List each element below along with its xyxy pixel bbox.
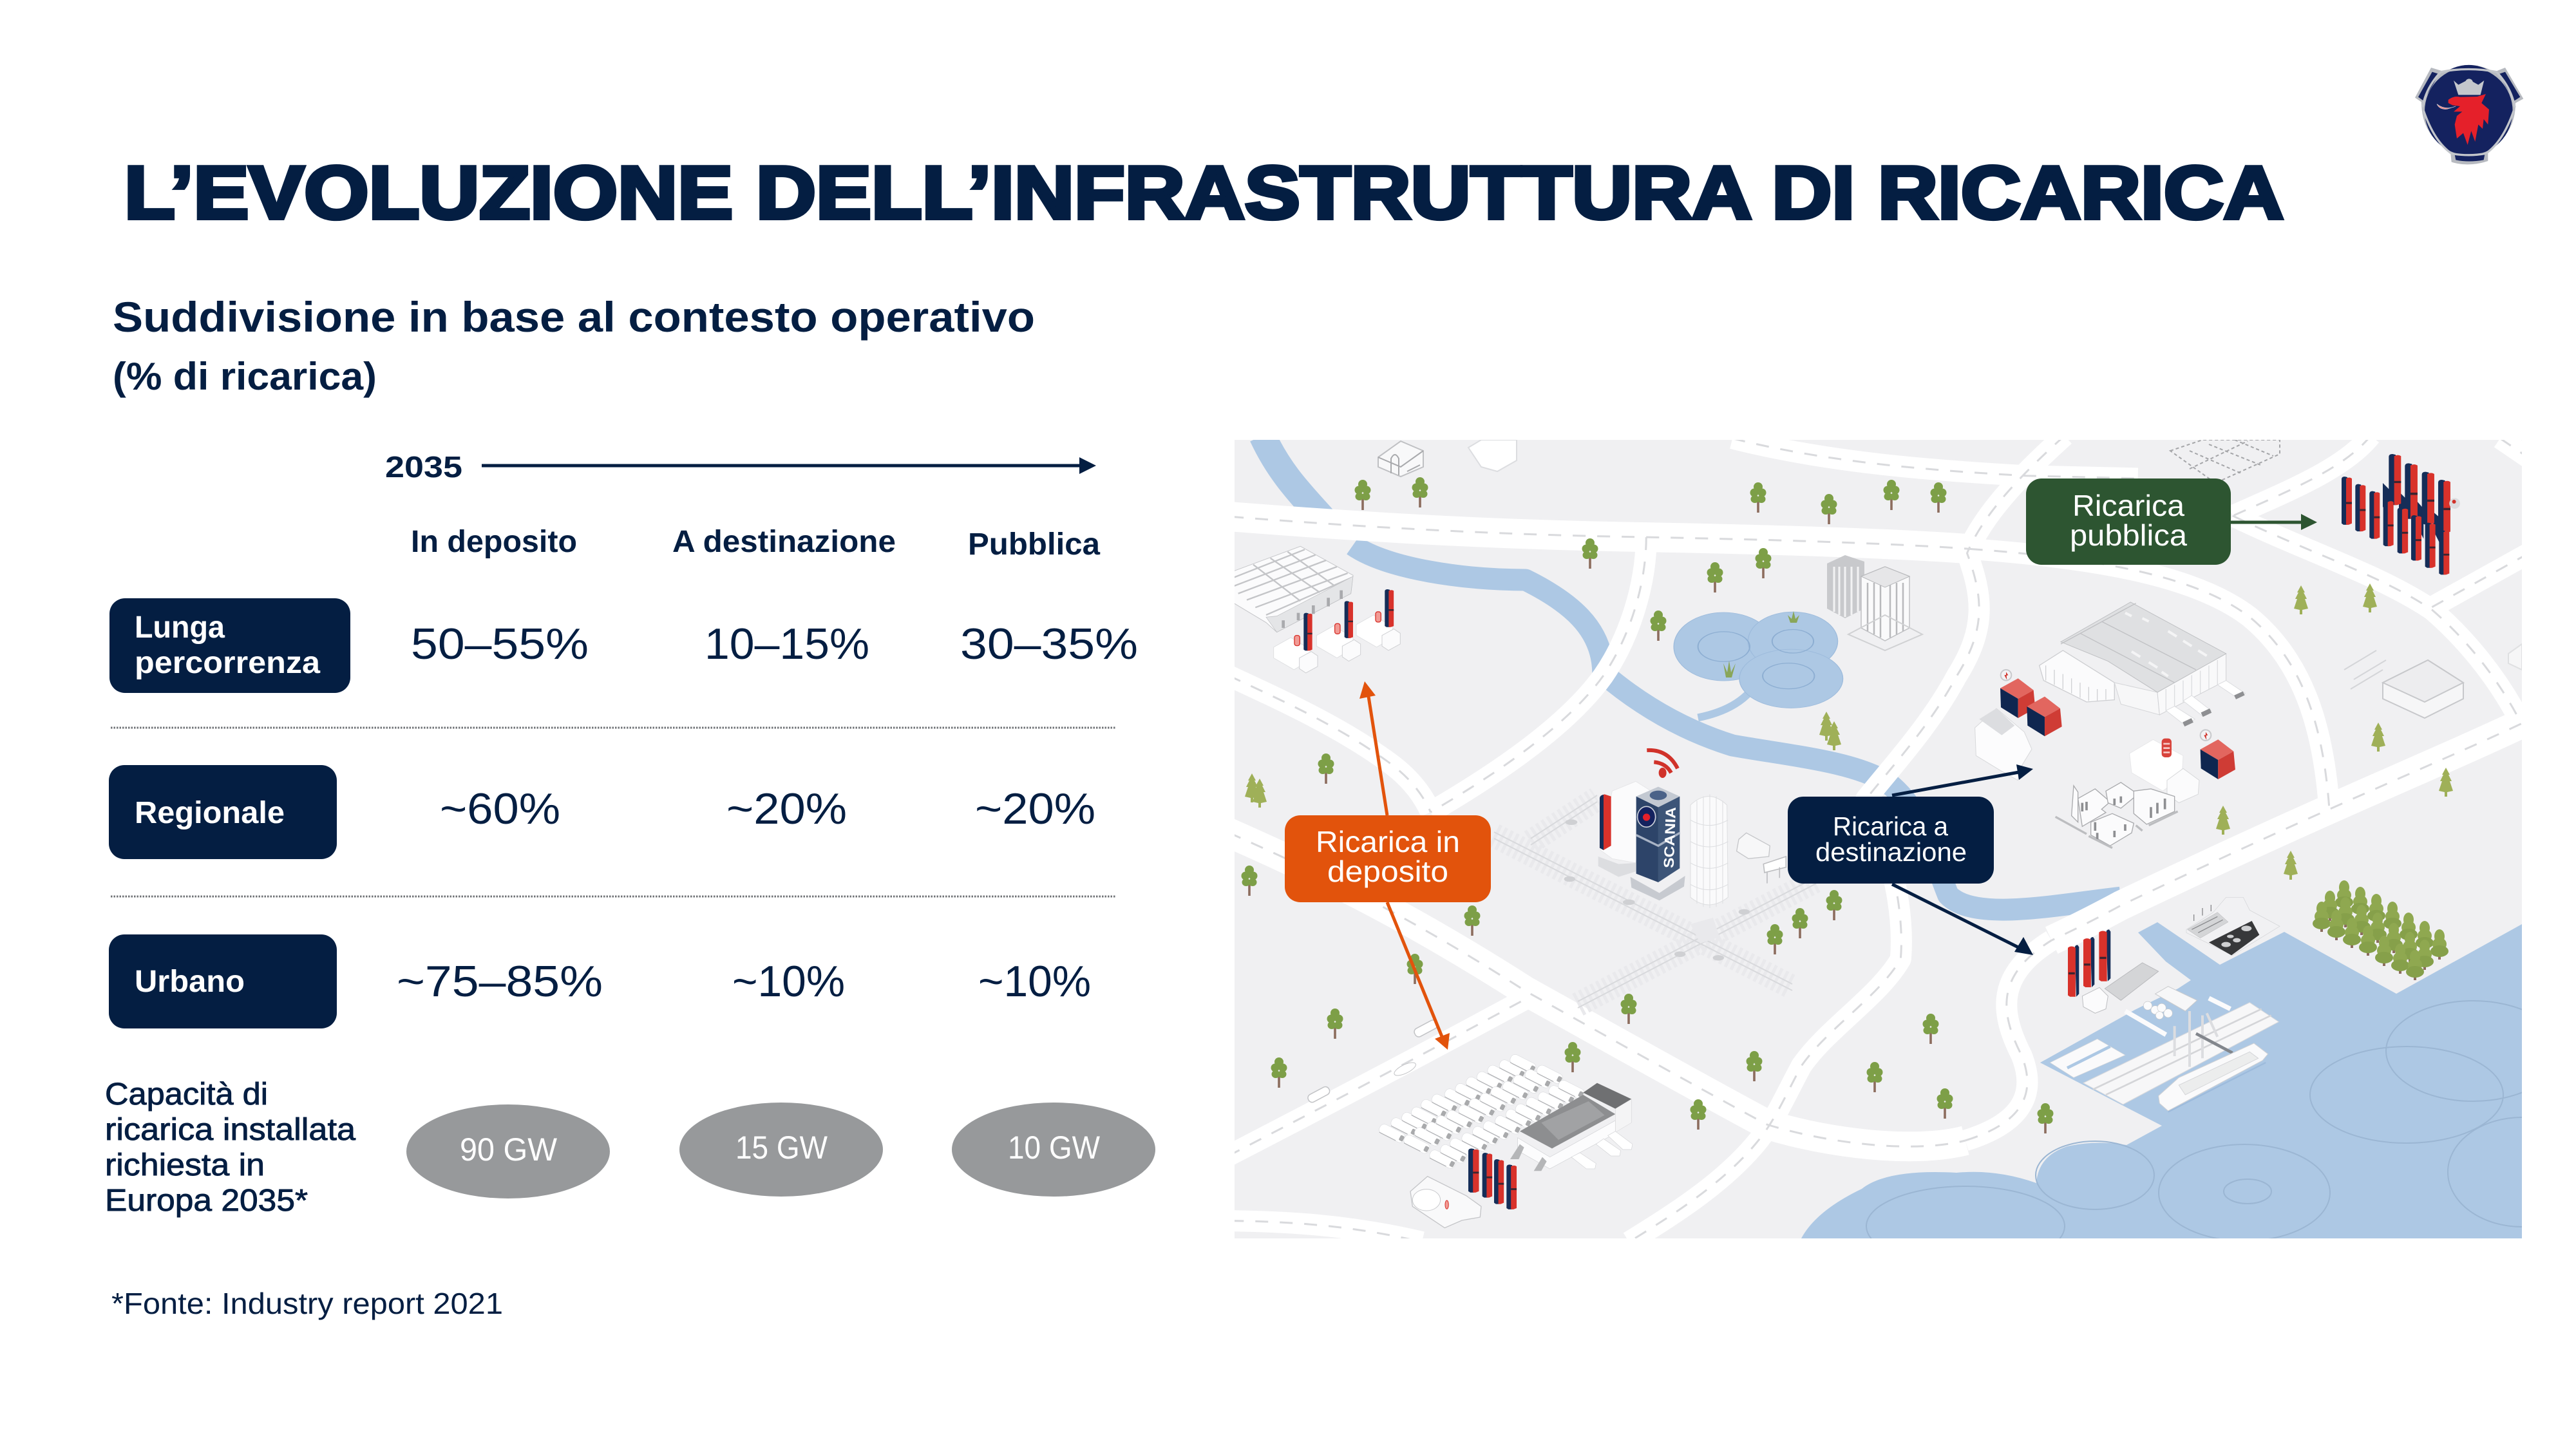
icon: Scania logo	[2415, 65, 2523, 164]
row: Lunga percorrenza: Lunga	[135, 611, 225, 645]
trees	[1242, 477, 2453, 1133]
roads	[1206, 436, 2543, 1242]
capacity ellipse 15 GW: 15 GW	[735, 1130, 828, 1166]
row: Lunga percorrenza: percorrenza	[135, 646, 320, 680]
callout: Ricarica pubblica: pubblica	[2070, 518, 2187, 552]
row: Lunga percorrenza: 10–15%	[705, 620, 869, 668]
subheading	[113, 293, 1035, 398]
arrow: public	[2231, 514, 2317, 530]
capacity ellipse 90 GW: 90 GW	[460, 1132, 558, 1168]
river and pond	[1262, 436, 2121, 910]
row: Urbano: Urbano	[135, 965, 245, 999]
callout: Ricarica in deposito	[1285, 815, 1491, 902]
callout: Ricarica in deposito: deposito	[1327, 855, 1448, 888]
panel: city map illustration	[1206, 436, 2576, 1266]
row: Regionale: ~60%	[440, 784, 560, 833]
fleet depot with vans	[1378, 1053, 1633, 1228]
column headers: Pubblica	[968, 527, 1100, 562]
rail lines	[1494, 795, 1816, 1008]
forest cluster	[2313, 880, 2448, 980]
row: capacity label: ricarica installata	[105, 1113, 355, 1147]
Scania headquarters	[1564, 750, 1786, 961]
timeline arrow 2035	[385, 450, 1096, 484]
column headers: A destinazione	[672, 525, 896, 559]
sea	[1801, 922, 2522, 1238]
row: capacity label: richiesta in	[105, 1148, 265, 1182]
capacity ellipse 90 GW	[406, 1104, 610, 1198]
callout: Ricarica a destinazione: Ricarica a	[1833, 811, 1948, 841]
public charging hub	[2342, 454, 2460, 574]
row: Regionale: ~20%	[975, 784, 1095, 833]
arrow: depot down	[1387, 902, 1450, 1050]
row: Regionale: Regionale	[135, 796, 285, 830]
office towers	[1827, 555, 1922, 650]
road vehicles	[1307, 1019, 1439, 1104]
column headers	[411, 525, 1100, 562]
top buildings	[1378, 440, 2280, 483]
capacity ellipse 15 GW	[679, 1103, 883, 1197]
source note: *Fonte: Industry report 2021	[111, 1287, 503, 1320]
subheading: (% di ricarica)	[113, 355, 377, 398]
row: capacity label: Europa 2035*	[105, 1184, 308, 1218]
row: Urbano: ~10%	[978, 957, 1091, 1006]
arrow: destination up	[1892, 764, 2033, 795]
row: Lunga percorrenza: 30–35%	[960, 620, 1138, 668]
harbour: port, ship, truck and chargers	[2040, 897, 2280, 1112]
capacity ellipse 10 GW	[952, 1103, 1155, 1197]
row: Regionale	[109, 765, 1095, 859]
row: Lunga percorrenza: 50–55%	[411, 620, 589, 668]
title: L’EVOLUZIONE DELL’INFRASTRUTTURA DI RICARICA	[124, 151, 2284, 234]
timeline arrow 2035: 2035	[385, 450, 462, 484]
right-side office block	[2344, 644, 2522, 718]
row: Urbano: ~75–85%	[397, 957, 603, 1006]
subheading: Suddivisione in base al contesto operativo	[113, 293, 1035, 341]
callout: Ricarica in deposito: Ricarica in	[1316, 825, 1460, 858]
arrow: depot up	[1359, 681, 1387, 815]
callout: Ricarica a destinazione: destinazione	[1815, 837, 1967, 867]
row: capacity label	[105, 1077, 355, 1218]
row: Urbano	[109, 934, 1091, 1028]
arrow: destination down	[1892, 884, 2033, 955]
callout: Ricarica pubblica	[2026, 478, 2231, 565]
row: Regionale: ~20%	[726, 784, 847, 833]
callout: Ricarica pubblica: Ricarica	[2072, 489, 2184, 522]
column headers: In deposito	[411, 525, 577, 559]
depot site: chargers and trucks	[1234, 546, 1400, 673]
row: Lunga percorrenza	[109, 598, 1138, 693]
panel: table	[105, 450, 1155, 1218]
row: Urbano: ~10%	[732, 957, 845, 1006]
destination site: warehouse, cubes, houses	[1975, 602, 2246, 848]
row: capacity label: Capacità di	[105, 1077, 268, 1112]
Scania headquarters: SCANIA	[1661, 807, 1679, 868]
capacity ellipse 10 GW: 10 GW	[1008, 1130, 1101, 1166]
callout: Ricarica a destinazione	[1788, 797, 1994, 884]
